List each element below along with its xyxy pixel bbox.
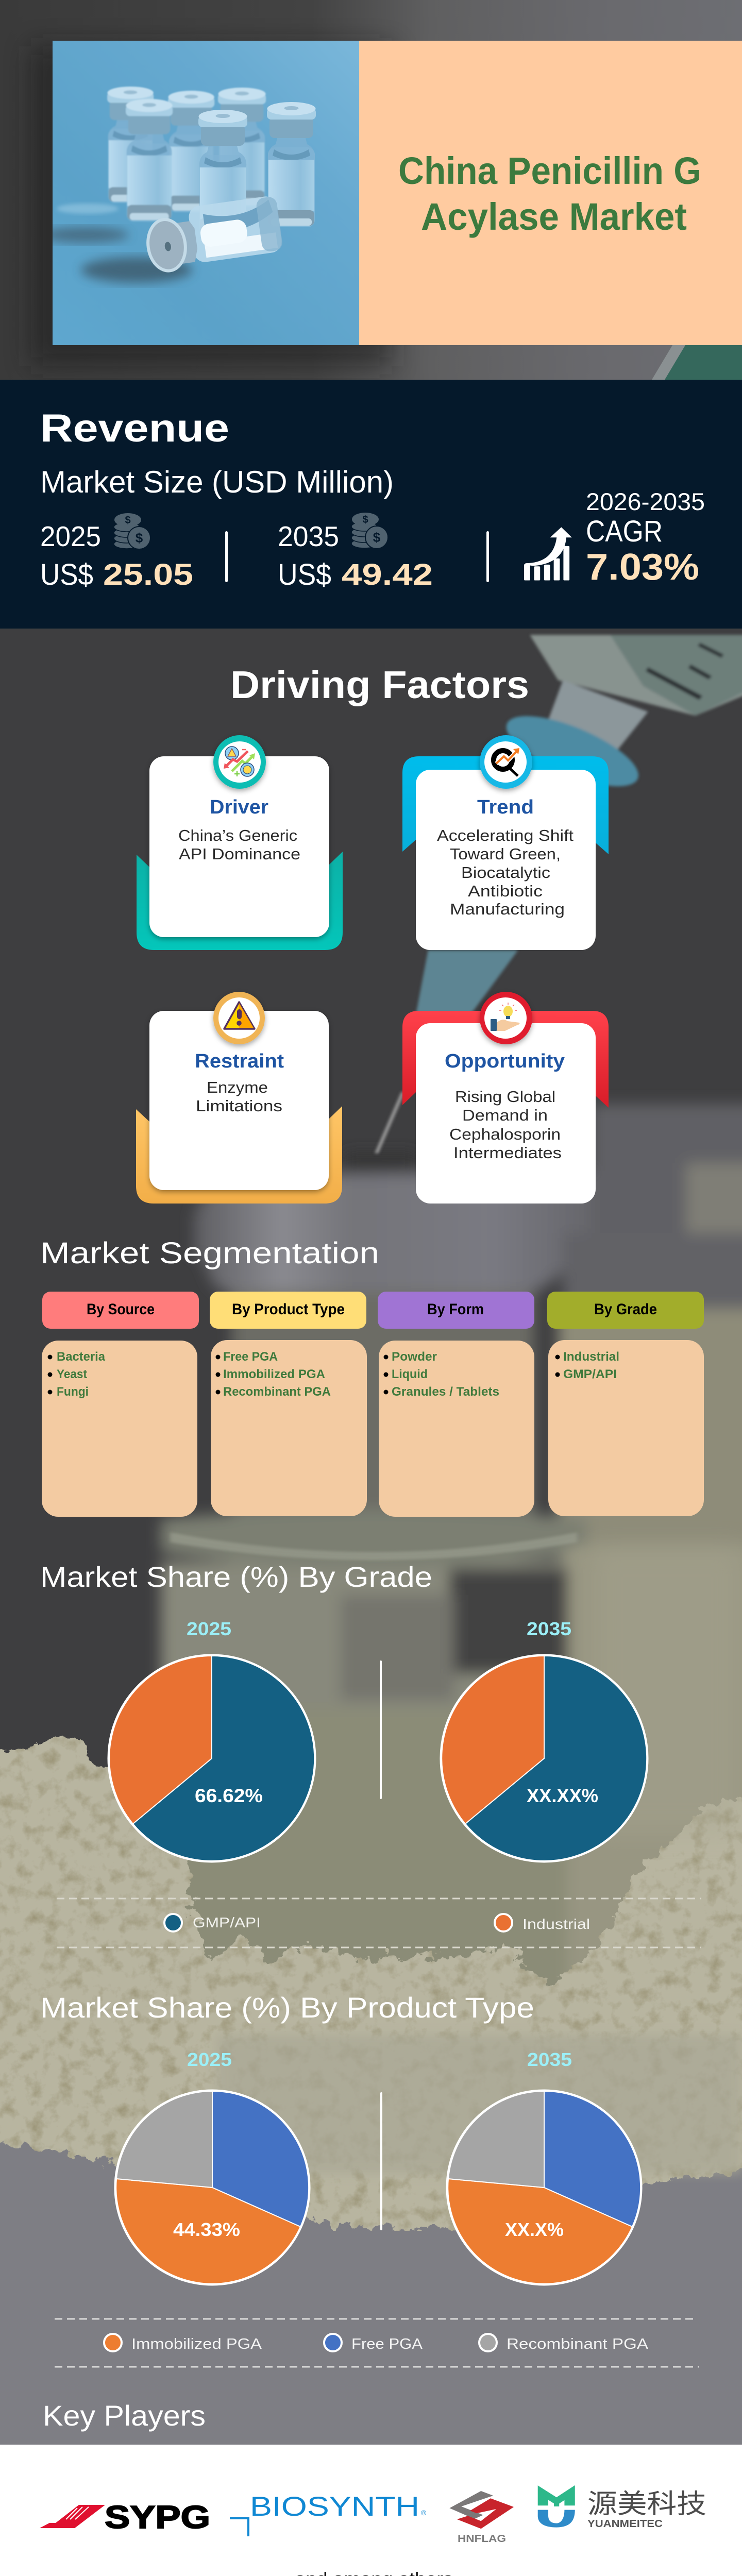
heading: market share by product type: Market Share (%) By Product Type	[40, 1991, 534, 2024]
text: trend description	[437, 826, 574, 918]
label: restraint: Restraint	[195, 1050, 284, 1072]
list: product type items: Immobilized PGA	[223, 1367, 325, 1381]
text: opportunity description: Cephalosporin	[449, 1125, 561, 1143]
label: opportunity: Opportunity	[445, 1050, 565, 1072]
text: opportunity description: Rising Global	[455, 1088, 555, 1106]
card: opportunity	[402, 992, 609, 1204]
stat: 2025: US$	[40, 558, 93, 591]
stat: 2025: 25.05	[103, 558, 193, 591]
chart: product type share 2025: 2025	[187, 2049, 232, 2070]
card: restraint	[136, 992, 342, 1204]
heading: market segmentation: Market Segmentation	[40, 1236, 379, 1270]
chart: product type share 2035: XX.X%	[505, 2219, 564, 2240]
title: Acylase Market	[421, 195, 687, 238]
hero banner	[41, 41, 742, 345]
stat: 2035: US$	[278, 558, 331, 591]
panel: segmentation by source: By Source	[87, 1301, 155, 1318]
text: restraint description: Limitations	[196, 1097, 282, 1115]
text: trend description: Biocatalytic	[461, 863, 550, 882]
icon: opportunity	[480, 992, 532, 1044]
heading: market share by grade: Market Share (%) By Grade	[40, 1561, 432, 1593]
list: source items: Bacteria	[57, 1350, 106, 1364]
stat: CAGR	[586, 488, 705, 588]
logo: SYPG	[40, 2500, 210, 2535]
text: trend description: Antibiotic	[468, 882, 543, 900]
list: form items: Liquid	[392, 1367, 428, 1381]
list: form items: Granules / Tablets	[392, 1385, 499, 1399]
title: China Penicillin G	[398, 149, 701, 192]
text: driver description: China’s Generic	[178, 826, 297, 844]
logo: SYPG: SYPG	[105, 2500, 210, 2535]
text: restraint description	[196, 1078, 282, 1115]
text: driver description: API Dominance	[179, 845, 300, 863]
chart: product type share 2025	[115, 2049, 309, 2284]
chart: grade share 2035	[441, 1618, 647, 1861]
card: driver	[137, 735, 343, 950]
legend: product type: Immobilized PGA	[131, 2336, 262, 2352]
chart: grade share 2025: 2025	[187, 1618, 231, 1639]
label: driver: Driver	[210, 796, 268, 818]
list: form items	[383, 1350, 499, 1399]
chart: grade share 2025	[109, 1618, 315, 1861]
title	[398, 149, 701, 238]
text: opportunity description: Demand in	[462, 1106, 548, 1124]
panel: segmentation by source	[42, 1292, 199, 1517]
chart: grade share 2035: 2035	[527, 1618, 571, 1639]
card: trend	[402, 735, 609, 950]
list: grade items	[555, 1350, 619, 1381]
stat: CAGR: 7.03%	[586, 547, 699, 588]
list: form items: Powder	[392, 1350, 437, 1364]
title panel	[359, 41, 742, 345]
icon: driver	[213, 735, 266, 789]
legend: product type	[55, 2319, 699, 2367]
stat: 2035: 2035	[278, 520, 339, 552]
logo: Biosynth	[230, 2492, 427, 2536]
chart: grade share 2025: 66.62%	[195, 1785, 263, 1806]
stat: CAGR: 2026-2035	[586, 488, 705, 515]
logo: Biosynth: BIOSYNTH	[250, 2492, 419, 2522]
text: trend description: Accelerating Shift	[437, 826, 574, 844]
logo: HNFLAG: HNFLAG	[458, 2533, 506, 2545]
text: restraint description: Enzyme	[207, 1078, 268, 1096]
legend: grade	[57, 1899, 701, 1947]
panel: segmentation by grade: By Grade	[594, 1301, 657, 1318]
list: source items: Yeast	[57, 1367, 87, 1381]
text: opportunity description	[449, 1088, 562, 1162]
list: product type items: Free PGA	[223, 1350, 278, 1364]
panel: segmentation by form: By Form	[427, 1301, 484, 1318]
list: product type items	[215, 1350, 331, 1399]
photo: glass vials	[41, 41, 359, 345]
icon: trend	[480, 735, 532, 789]
panel: segmentation by grade	[547, 1292, 704, 1516]
heading: key players: Key Players	[43, 2399, 206, 2432]
legend: grade: GMP/API	[193, 1914, 261, 1930]
list: source items	[47, 1350, 106, 1399]
legend: grade: Industrial	[522, 1916, 590, 1932]
text: trend description: Toward Green,	[450, 845, 561, 863]
panel: key players logos	[0, 2445, 742, 2576]
chart: product type share 2035: 2035	[527, 2049, 572, 2070]
label: trend: Trend	[477, 796, 534, 818]
chart: product type share 2025: 44.33%	[173, 2219, 240, 2240]
text: trend description: Manufacturing	[450, 900, 565, 918]
list: product type items: Recombinant PGA	[223, 1385, 331, 1399]
panel: revenue	[0, 380, 742, 629]
panel: segmentation by form	[378, 1292, 534, 1517]
list: source items: Fungi	[57, 1385, 89, 1399]
heading: driving factors: Driving Factors	[230, 663, 529, 706]
icon: restraint	[213, 992, 265, 1044]
heading: revenue: Revenue	[40, 406, 229, 450]
list: grade items: GMP/API	[563, 1367, 617, 1381]
logo: HNFLAG	[449, 2491, 514, 2545]
stat: 2025	[40, 513, 193, 591]
text: opportunity description: Intermediates	[453, 1144, 562, 1162]
chart: grade share 2035: XX.XX%	[527, 1785, 598, 1806]
list: grade items: Industrial	[563, 1350, 619, 1364]
stat: 2035: 49.42	[342, 558, 433, 591]
subheading: market size: Market Size (USD Million)	[40, 465, 394, 499]
stat: 2025: 2025	[40, 520, 101, 552]
stat: 2035	[278, 513, 433, 591]
panel: segmentation by product type	[210, 1292, 367, 1516]
legend: product type: Free PGA	[351, 2336, 423, 2352]
text: driver description	[178, 826, 300, 863]
logo: Yuanmeitec: YUANMEITEC	[587, 2518, 663, 2530]
stat: CAGR: CAGR	[586, 515, 663, 548]
legend: product type: Recombinant PGA	[507, 2336, 649, 2352]
chart: product type share 2035	[447, 2049, 641, 2284]
logo: Yuanmeitec: 源美科技	[587, 2489, 706, 2519]
logo: Yuanmeitec	[543, 2489, 706, 2530]
icon: growth chart	[524, 527, 572, 581]
logo: Biosynth: ®	[421, 2509, 427, 2517]
panel: segmentation by product type: By Product Type	[232, 1301, 345, 1318]
